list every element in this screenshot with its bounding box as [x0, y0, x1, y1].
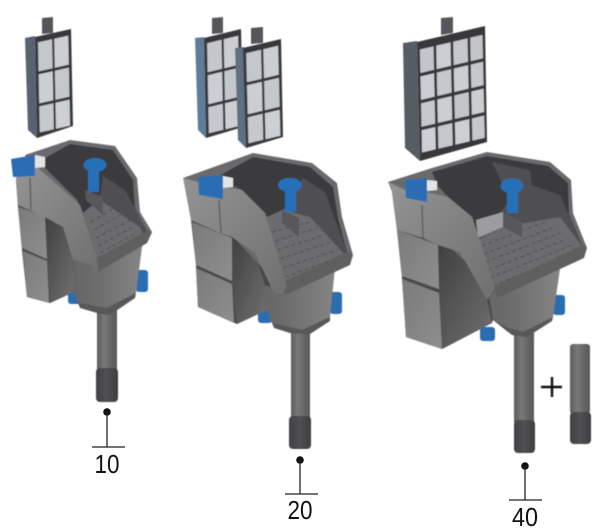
size marker: 10: 10	[94, 449, 120, 479]
housing backing	[187, 187, 335, 334]
plus sign	[541, 377, 562, 397]
black intake tip	[289, 416, 311, 449]
blue clip	[11, 155, 35, 177]
inner right wall	[267, 178, 347, 285]
perforated tray	[478, 217, 583, 292]
black intake tip	[514, 420, 535, 453]
filter unit: size 40	[388, 152, 587, 453]
lower tube	[97, 310, 117, 370]
silver intake plate	[476, 212, 503, 238]
blue knob	[500, 178, 524, 213]
white clip	[223, 176, 233, 188]
collar	[272, 317, 330, 334]
inner chamber	[45, 144, 147, 258]
stacked front boxes	[397, 230, 442, 349]
housing side	[438, 245, 492, 349]
housing side	[45, 217, 74, 303]
housing backing	[16, 180, 142, 315]
inner right wall	[478, 162, 583, 292]
size marker: 20: 20	[288, 495, 312, 525]
filter cartridge: size 20, front	[235, 27, 283, 148]
stacked front boxes	[18, 207, 49, 303]
hopper	[73, 244, 142, 308]
size marker: 20	[285, 456, 318, 525]
hopper	[262, 264, 335, 330]
outer rim	[388, 152, 587, 298]
outer rim	[183, 153, 353, 295]
outer rim	[25, 140, 152, 272]
blue rear ports	[480, 295, 565, 341]
blue rear ports	[258, 292, 342, 323]
tray lip	[97, 231, 152, 272]
blue rear ports	[68, 270, 148, 304]
divider plate	[85, 190, 103, 215]
filter unit: size 20	[183, 153, 353, 449]
filter unit: size 10	[11, 140, 152, 402]
black intake tip	[96, 368, 118, 402]
inner right wall	[84, 176, 147, 258]
divider plate	[503, 212, 522, 237]
collar	[78, 293, 136, 315]
housing backing	[392, 192, 560, 349]
inner chamber	[215, 157, 347, 285]
tray lip	[281, 252, 353, 295]
blue knob	[84, 158, 106, 192]
filter cartridge: size 20, rear	[195, 17, 243, 138]
lower tube	[291, 330, 310, 418]
filter cartridge: size 10	[25, 17, 73, 138]
extension tube accessory	[570, 344, 591, 444]
stacked front boxes	[192, 222, 234, 323]
filter cartridge: size 40	[403, 17, 487, 161]
inner chamber	[432, 156, 583, 292]
front ramp panel	[388, 182, 495, 300]
blue clip	[198, 175, 223, 199]
tray lip	[493, 245, 587, 298]
perforated tray	[83, 200, 143, 260]
front ramp panel	[183, 178, 287, 295]
size marker: 10	[92, 408, 125, 479]
white clip	[427, 180, 437, 191]
size marker: 40: 40	[512, 502, 538, 532]
perforated tray	[267, 210, 345, 285]
white clip	[35, 155, 45, 168]
lower tube	[514, 330, 534, 422]
housing side	[232, 238, 267, 324]
blue clip	[405, 178, 427, 202]
divider plate	[282, 210, 299, 237]
front ramp panel	[16, 167, 98, 272]
size marker: 40	[509, 462, 542, 532]
hopper	[488, 266, 560, 332]
blue knob	[278, 178, 302, 212]
collar	[505, 317, 553, 337]
